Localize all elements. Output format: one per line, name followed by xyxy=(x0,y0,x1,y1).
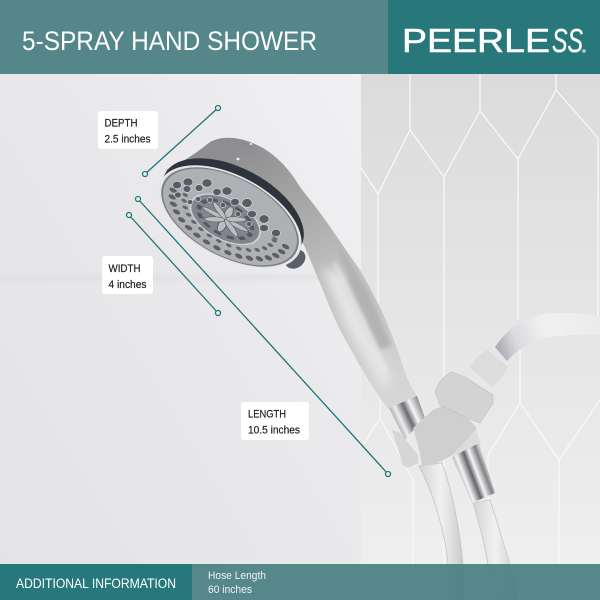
footer: hose length xyxy=(192,564,600,600)
thumb knob xyxy=(281,245,309,273)
shower arm tube xyxy=(495,313,600,361)
footer: additional information heading xyxy=(0,564,192,600)
callout: length line xyxy=(136,196,390,476)
footer: hose length: 60 inches xyxy=(208,584,252,596)
callout: length label: 10.5 inches xyxy=(248,424,300,436)
clip body xyxy=(413,405,477,466)
upper chrome collar xyxy=(389,396,425,440)
hose left xyxy=(419,463,463,600)
swivel joint xyxy=(435,372,493,423)
background: tiled wall xyxy=(361,0,600,600)
callout: length label: LENGTH xyxy=(248,408,286,420)
spray nozzles xyxy=(172,178,280,237)
lower chrome sleeve xyxy=(452,443,495,503)
swivel neck xyxy=(470,350,508,387)
hand shower xyxy=(161,138,417,409)
header bar: Peerless logo: PEERLE xyxy=(402,23,550,60)
back clip xyxy=(392,430,418,468)
mount bracket xyxy=(389,350,508,503)
hose right xyxy=(473,500,518,600)
dark band behind faceplate xyxy=(145,137,321,283)
callout: width label: 4 inches xyxy=(108,279,147,291)
neck under swivel xyxy=(452,423,481,458)
header bar: Peerless logo xyxy=(388,0,600,74)
footer: hose length: Hose Length xyxy=(208,570,266,582)
header bar: Peerless logo: SS xyxy=(552,23,583,60)
footer: additional information heading: ADDITIONAL INFORMATION xyxy=(16,576,176,591)
head and handle body xyxy=(166,138,417,409)
callout: depth line xyxy=(142,106,220,176)
background: left wall xyxy=(0,0,363,600)
callout: depth label: 2.5 inches xyxy=(104,134,151,146)
callout: depth label xyxy=(98,111,158,149)
callout: width line xyxy=(126,212,220,316)
header bar: product title: 5-SPRAY HAND SHOWER xyxy=(22,26,317,56)
callout: width label: WIDTH xyxy=(108,263,141,275)
callout: depth label: DEPTH xyxy=(104,118,138,130)
faceplate xyxy=(161,165,302,267)
header bar: product title xyxy=(0,0,388,74)
callout: width label xyxy=(102,256,153,294)
callout: length label xyxy=(241,402,309,440)
